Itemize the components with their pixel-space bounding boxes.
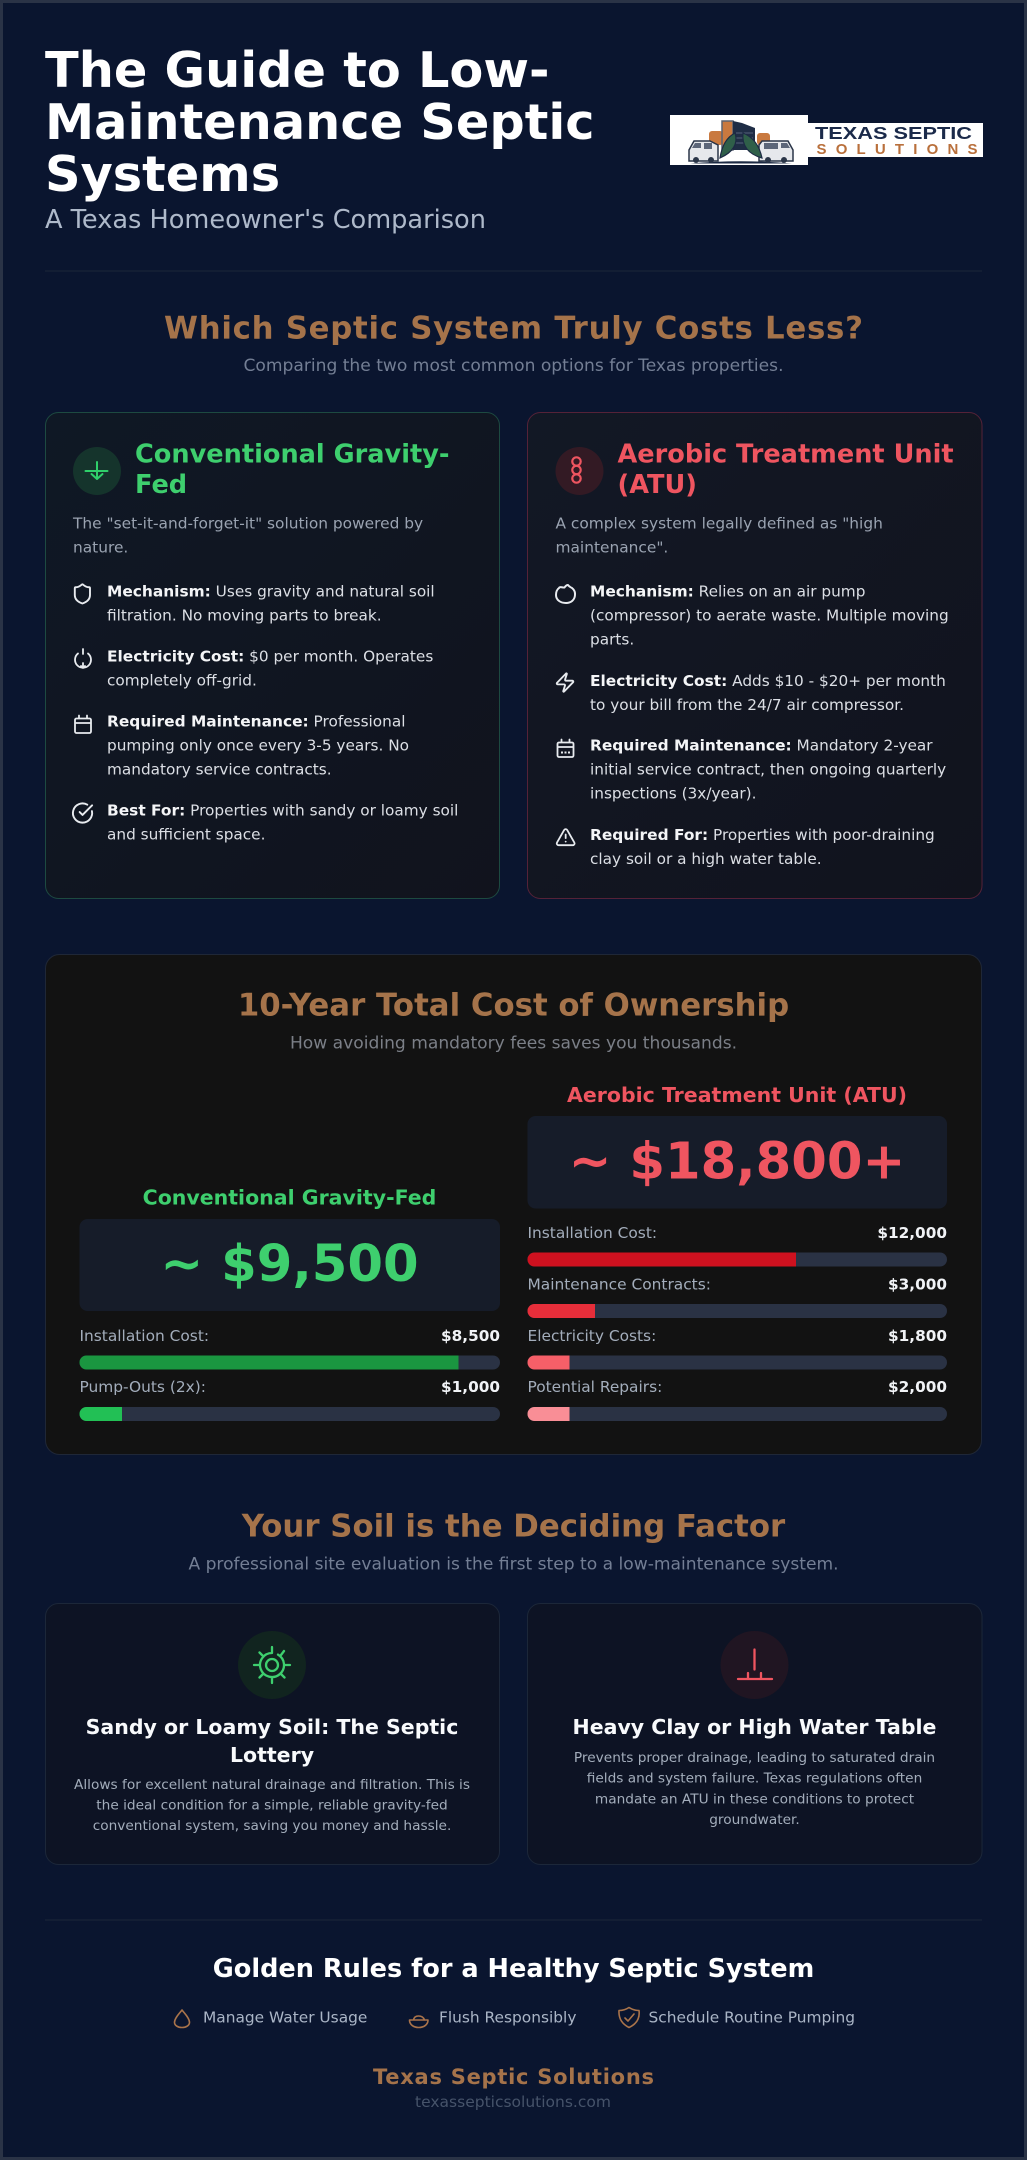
icon: water table xyxy=(720,1631,788,1699)
golden rules xyxy=(174,1954,855,2028)
logo: SOLUTIONS xyxy=(816,141,978,158)
list item: best for: Properties with sandy or loamy soil xyxy=(185,802,458,820)
card body: Allows for excellent natural drainage and filtration. This is xyxy=(74,1777,470,1793)
bar: electricity xyxy=(528,1327,947,1370)
list item: best for: and sufficient space. xyxy=(107,826,265,844)
logo xyxy=(670,115,983,165)
list item: electricity xyxy=(557,672,946,714)
column: atu costs xyxy=(528,1083,947,1421)
total box xyxy=(80,1219,500,1311)
rule: water usage: Manage Water Usage xyxy=(203,2008,367,2026)
card body: groundwater. xyxy=(709,1812,800,1828)
list item: maintenance: pumping only once every 3-5 years. No xyxy=(107,736,409,754)
list item: maintenance xyxy=(75,712,409,778)
card heading: Lottery xyxy=(230,1743,314,1767)
bar: maintenance contracts: $3,000 xyxy=(888,1276,947,1294)
heading: 10-Year Total Cost of Ownership xyxy=(238,988,789,1024)
heading: which system: Comparing the two most common options for Texas properties. xyxy=(243,356,784,376)
total box: ~ $9,500 xyxy=(160,1234,419,1294)
card body: mandate an ATU in these conditions to protect xyxy=(595,1792,915,1808)
list item: mechanism: Uses gravity and natural soil xyxy=(211,582,435,600)
card heading: Sandy or Loamy Soil: The Septic xyxy=(86,1715,458,1739)
list item: best for xyxy=(73,802,458,844)
list item: maintenance: mandatory service contracts. xyxy=(107,760,332,778)
bar: maintenance contracts: Maintenance Contracts: xyxy=(528,1276,711,1294)
subheading: How avoiding mandatory fees saves you thousands. xyxy=(290,1034,737,1054)
bar: pump-outs: Pump-Outs (2x): xyxy=(80,1378,206,1396)
heading: Golden Rules for a Healthy Septic System xyxy=(213,1954,814,1984)
footer: Texas Septic Solutions xyxy=(373,2065,654,2089)
list item: required for xyxy=(557,826,935,868)
list item: maintenance: Required Maintenance: xyxy=(590,736,792,754)
heading: which system xyxy=(164,310,863,376)
list item: electricity: Electricity Cost: xyxy=(590,672,727,690)
bar: installation: Installation Cost: xyxy=(80,1327,209,1345)
list item: required for: clay soil or a high water table. xyxy=(590,850,822,868)
list item: mechanism xyxy=(75,582,435,624)
total box xyxy=(528,1116,947,1208)
list item: mechanism xyxy=(556,582,949,648)
card description: maintenance". xyxy=(556,538,668,556)
card body: fields and system failure. Texas regulations often xyxy=(587,1770,922,1786)
total box: ~ $18,800+ xyxy=(569,1132,905,1192)
footer: texassepticsolutions.com xyxy=(415,2093,611,2111)
logo: TEXAS SEPTIC xyxy=(815,123,972,143)
card heading: Aerobic Treatment Unit xyxy=(618,440,954,470)
list item: electricity: Electricity Cost: xyxy=(107,648,244,666)
panel: 10-year total cost of ownership xyxy=(46,954,982,1454)
panel: sandy soil xyxy=(46,1604,500,1864)
panel: conventional gravity-fed xyxy=(46,412,500,898)
list item: mechanism: parts. xyxy=(590,630,634,648)
card description: The "set-it-and-forget-it" solution powered by xyxy=(72,514,423,532)
list item: mechanism: Mechanism: xyxy=(107,582,211,600)
bar: installation: $8,500 xyxy=(441,1327,500,1345)
bar: repairs xyxy=(528,1378,947,1421)
card heading: Fed xyxy=(135,470,187,500)
list item: maintenance: Professional xyxy=(309,712,405,730)
list item: mechanism: Mechanism: xyxy=(590,582,694,600)
rule: flush: Flush Responsibly xyxy=(439,2008,576,2026)
subtitle: A Texas Homeowner's Comparison xyxy=(45,205,486,235)
panel: heavy clay xyxy=(528,1604,982,1864)
bar: installation: $12,000 xyxy=(877,1224,947,1242)
card heading: Heavy Clay or High Water Table xyxy=(573,1715,936,1739)
list item: electricity: Adds $10 - $20+ per month xyxy=(727,672,946,690)
heading: soil xyxy=(188,1508,839,1574)
rule: pumping: Schedule Routine Pumping xyxy=(648,2008,855,2026)
title: Maintenance Septic xyxy=(45,93,595,151)
list item: maintenance: Mandatory 2-year xyxy=(792,736,933,754)
card heading: Conventional Gravity- xyxy=(135,440,450,470)
list item: electricity: to your bill from the 24/7 air compressor. xyxy=(590,696,904,714)
list item: required for: Properties with poor-draining xyxy=(708,826,935,844)
card heading: (ATU) xyxy=(618,470,697,500)
heading: which system: Which Septic System Truly Costs Less? xyxy=(164,310,863,346)
list item: electricity: $0 per month. Operates xyxy=(244,648,433,666)
bar: installation xyxy=(528,1224,947,1266)
list item: maintenance: Required Maintenance: xyxy=(107,712,309,730)
icon: gravity arrow xyxy=(73,447,121,495)
card description: nature. xyxy=(73,538,128,556)
list item: required for: Required For: xyxy=(590,826,708,844)
bar: repairs: Potential Repairs: xyxy=(528,1378,662,1396)
list item: maintenance: initial service contract, then ongoing quarterly xyxy=(590,760,946,778)
list item: best for: Best For: xyxy=(107,802,185,820)
bar: installation: Installation Cost: xyxy=(528,1224,657,1242)
footer xyxy=(373,2065,654,2111)
panel: aerobic treatment unit xyxy=(528,412,982,898)
list item: mechanism: Relies on an air pump xyxy=(694,582,865,600)
card body: Prevents proper drainage, leading to saturated drain xyxy=(574,1750,935,1766)
bar: pump-outs xyxy=(80,1378,500,1421)
column: conventional costs xyxy=(80,1186,500,1421)
list item: maintenance: inspections (3x/year). xyxy=(590,784,756,802)
heading: soil: Your Soil is the Deciding Factor xyxy=(241,1508,786,1544)
list item: maintenance xyxy=(558,736,946,802)
header xyxy=(45,41,983,235)
list item: electricity xyxy=(75,648,433,690)
card description: A complex system legally defined as "high xyxy=(556,514,883,532)
bar: electricity: Electricity Costs: xyxy=(528,1327,656,1345)
icon: aeration bubbles xyxy=(556,447,604,495)
heading: soil: A professional site evaluation is the first step to a low-maintenance system. xyxy=(188,1554,839,1574)
column: conventional costs: Conventional Gravity-Fed xyxy=(143,1186,436,1210)
card body: conventional system, saving you money and hassle. xyxy=(93,1818,451,1834)
title: The Guide to Low- xyxy=(45,41,550,99)
icon: soil sun xyxy=(238,1631,306,1699)
bar: maintenance contracts xyxy=(528,1276,947,1318)
card body: the ideal condition for a simple, reliable gravity-fed xyxy=(96,1798,448,1814)
list item: electricity: completely off-grid. xyxy=(107,672,257,690)
title: Systems xyxy=(45,145,280,203)
bar: pump-outs: $1,000 xyxy=(441,1378,500,1396)
column: atu costs: Aerobic Treatment Unit (ATU) xyxy=(567,1083,907,1107)
bar: electricity: $1,800 xyxy=(888,1327,947,1345)
bar: repairs: $2,000 xyxy=(888,1378,947,1396)
list item: mechanism: (compressor) to aerate waste. Multiple moving xyxy=(590,606,949,624)
list item: mechanism: filtration. No moving parts to break. xyxy=(107,606,382,624)
bar: installation xyxy=(80,1327,500,1370)
